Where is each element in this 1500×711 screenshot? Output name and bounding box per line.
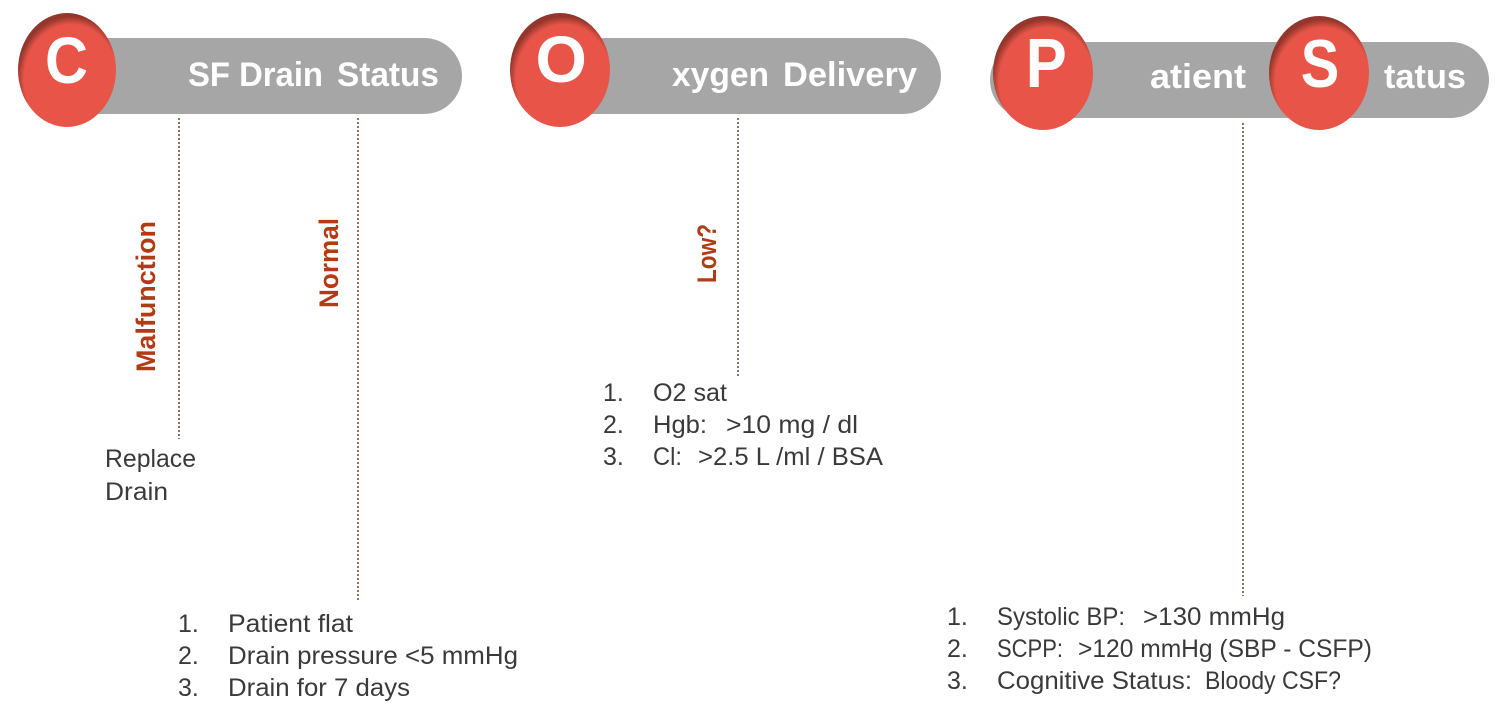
list: oxygen delivery items: 3. xyxy=(603,443,624,471)
label: Low?: Low? xyxy=(692,224,722,283)
icon: letter P circle: P xyxy=(1026,24,1067,102)
icon: letter C circle xyxy=(18,13,116,127)
list: normal drain steps: 2. xyxy=(178,642,199,670)
text: Replace Drain: Replace xyxy=(105,445,196,473)
heading: SF Drain Status: Status xyxy=(337,56,439,94)
icon: letter O circle: O xyxy=(536,22,587,96)
connector: malfunction line xyxy=(178,118,180,439)
list: patient status items: 1. xyxy=(947,603,968,631)
heading: xygen Delivery: xygen xyxy=(672,56,769,94)
icon: letter P circle xyxy=(993,16,1093,130)
list: patient status items: >120 mmHg (SBP - CSFP) xyxy=(1078,635,1372,663)
list: normal drain steps: Patient flat xyxy=(228,610,353,638)
heading: tatus: tatus xyxy=(1384,58,1466,96)
icon: letter O circle xyxy=(510,13,610,127)
list: oxygen delivery items: Cl: xyxy=(653,443,682,471)
list: oxygen delivery items: O2 sat xyxy=(653,379,727,407)
list: patient status items: Cognitive Status: xyxy=(997,667,1192,695)
list: oxygen delivery items: >10 mg / dl xyxy=(726,411,858,439)
panel: patient status header xyxy=(990,16,1489,130)
heading: xygen Delivery: Delivery xyxy=(783,56,917,94)
icon: letter C circle: C xyxy=(45,23,88,97)
list: oxygen delivery items: >2.5 L /ml / BSA xyxy=(698,443,883,471)
icon: letter S circle: S xyxy=(1301,26,1339,102)
list: patient status items: SCPP: xyxy=(997,635,1063,663)
heading: atient: atient xyxy=(1150,58,1246,96)
panel: oxygen delivery header xyxy=(510,13,941,127)
label: Normal: Normal xyxy=(314,218,344,308)
heading: xygen Delivery xyxy=(672,56,917,94)
list: normal drain steps: Drain pressure <5 mmHg xyxy=(228,642,518,670)
list: oxygen delivery items: 1. xyxy=(603,379,624,407)
list: normal drain steps: 3. xyxy=(178,674,199,702)
text: Replace Drain: Drain xyxy=(105,478,168,506)
list: patient status items: Systolic BP: xyxy=(997,603,1125,631)
list: oxygen delivery items: 2. xyxy=(603,411,624,439)
list: normal drain steps xyxy=(178,610,518,702)
text: Replace Drain xyxy=(105,445,196,506)
panel: CSF drain status header xyxy=(18,13,462,127)
icon: letter S circle xyxy=(1269,16,1369,130)
list: oxygen delivery items xyxy=(603,379,883,471)
list: patient status items: Bloody CSF? xyxy=(1205,667,1341,695)
list: normal drain steps: 1. xyxy=(178,610,199,638)
list: normal drain steps: Drain for 7 days xyxy=(228,674,410,702)
heading: SF Drain Status: SF Drain xyxy=(188,56,323,94)
connector: patient status line xyxy=(1242,123,1244,596)
connector: low line xyxy=(737,118,739,378)
list: patient status items: 3. xyxy=(947,667,968,695)
heading: SF Drain Status xyxy=(188,56,439,94)
list: patient status items: 2. xyxy=(947,635,968,663)
list: patient status items xyxy=(947,603,1372,695)
list: patient status items: >130 mmHg xyxy=(1143,603,1285,631)
list: oxygen delivery items: Hgb: xyxy=(653,411,707,439)
connector: normal line xyxy=(357,118,359,601)
label: Malfunction: Malfunction xyxy=(131,221,161,372)
